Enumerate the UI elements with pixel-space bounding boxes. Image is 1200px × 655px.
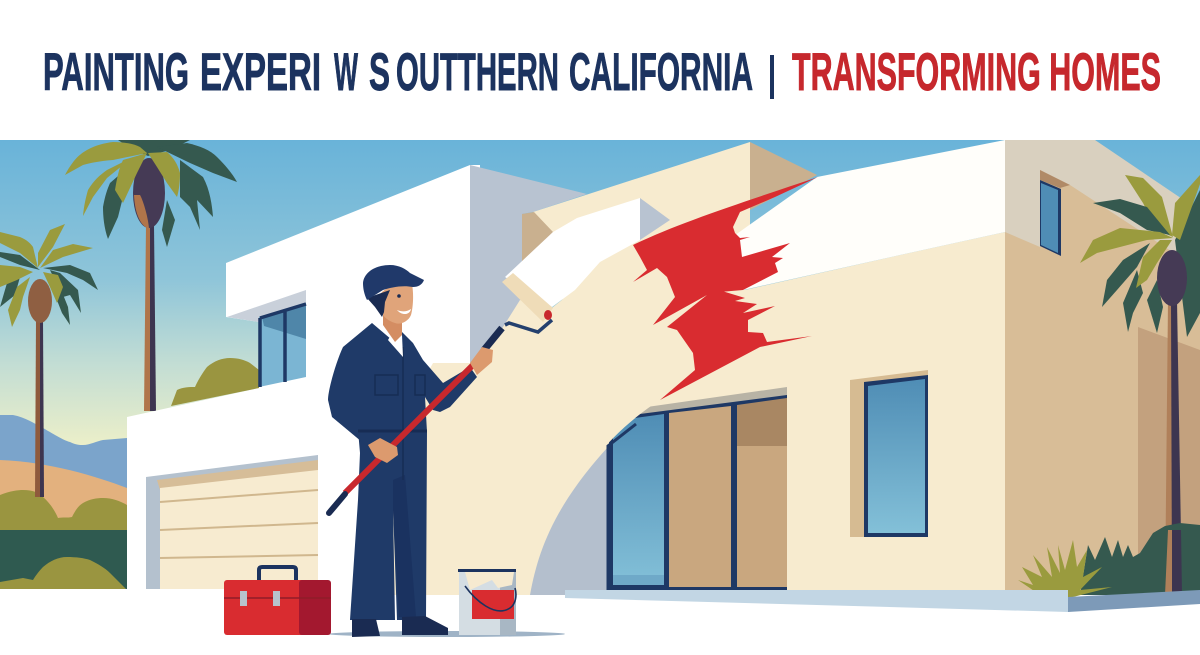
grey wedge behind stroke	[640, 198, 670, 240]
tan parapet	[522, 142, 817, 300]
title: EXPERI	[200, 43, 321, 102]
ground slab	[565, 590, 1200, 612]
title: S	[369, 43, 390, 102]
title: W	[334, 43, 358, 102]
roller frame	[505, 320, 552, 332]
sky	[0, 140, 1200, 450]
boots	[352, 616, 448, 637]
palm tree: tall	[65, 140, 237, 411]
title	[43, 43, 1161, 102]
upper left window	[259, 303, 306, 387]
title: OUTTHERN	[396, 43, 559, 102]
front right window	[850, 370, 928, 537]
cream wall edge over window	[535, 400, 660, 595]
high small window	[1040, 170, 1070, 256]
title: CALIFORNIA	[569, 43, 753, 102]
toolbox	[224, 567, 331, 635]
title: PAINTING	[43, 43, 189, 102]
painted cream wall	[382, 232, 1005, 595]
palm tree: small	[0, 224, 98, 497]
white building: upper and lower block	[127, 165, 587, 595]
background landscape	[0, 415, 127, 589]
large front window	[608, 387, 787, 590]
collar	[388, 328, 403, 357]
paint bucket	[458, 569, 516, 635]
cap	[363, 265, 424, 300]
pole	[345, 362, 476, 493]
torso and arms	[328, 323, 477, 447]
window frame left edge	[608, 424, 636, 590]
white fresh paint stroke: left	[505, 198, 640, 307]
head	[383, 312, 402, 342]
foreground plants	[1018, 523, 1200, 597]
grey wall shape	[530, 447, 608, 595]
right palm tree	[1080, 175, 1200, 595]
roller	[502, 273, 553, 322]
red paint streak	[633, 177, 818, 400]
pants	[350, 430, 427, 620]
worker painter	[328, 265, 553, 637]
white fresh paint stroke: right	[700, 140, 1005, 290]
right building side wall	[1005, 140, 1200, 595]
garage door	[146, 455, 318, 589]
bush behind terrace	[171, 358, 259, 406]
hands	[470, 347, 493, 375]
ground shadow	[329, 631, 565, 637]
